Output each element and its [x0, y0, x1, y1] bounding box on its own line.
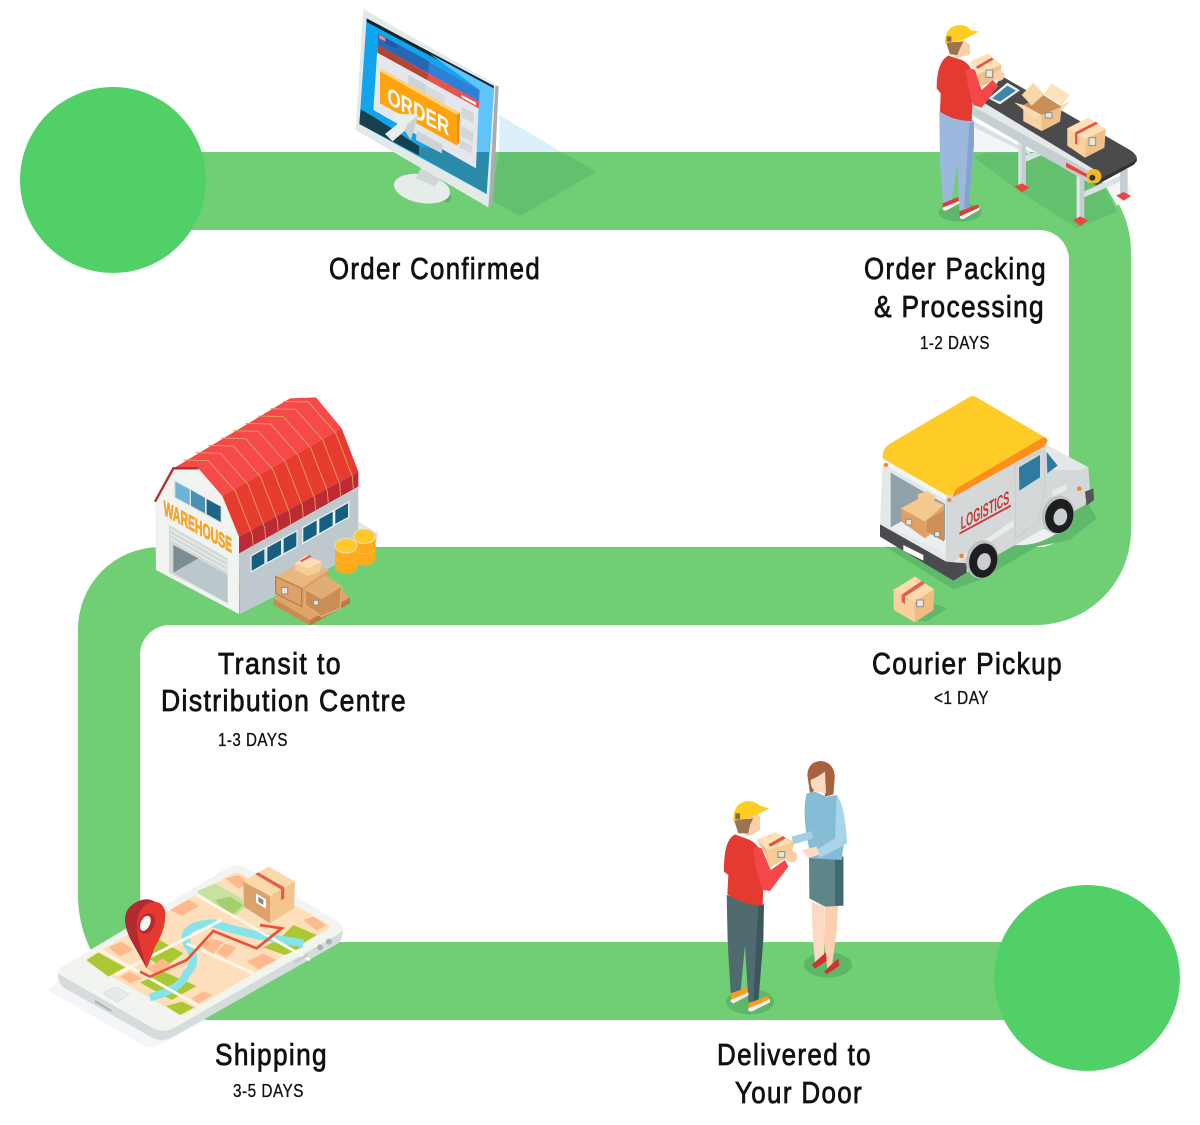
icon: worker packing boxes at conveyor [937, 25, 1137, 228]
step label: courier pickup: <1 DAY [934, 688, 989, 708]
warehouse roller door [169, 525, 228, 603]
map roads and parks [87, 875, 326, 1015]
step label: shipping: 3-5 DAYS [233, 1081, 304, 1101]
yellow barrels [335, 529, 376, 574]
step label: shipping: Shipping [215, 1037, 328, 1072]
tablet on belt [988, 83, 1020, 104]
map route line [140, 925, 282, 977]
step label: delivered to your door: Your Door [735, 1075, 863, 1110]
worker [937, 25, 1004, 222]
van cargo crates [901, 491, 944, 542]
end circle [994, 885, 1180, 1071]
courier [724, 801, 797, 1014]
step label: order packing and processing: 1-2 DAYS [920, 333, 990, 353]
step label: transit to distribution centre: Distribution Centre [161, 683, 407, 718]
van wheels [962, 492, 1078, 582]
phone buttons [95, 939, 332, 1012]
winding green route [78, 152, 1131, 1020]
customer [792, 761, 852, 978]
warehouse sign: WAREHOUSE [164, 496, 232, 558]
step label: transit to distribution centre: 1-3 DAYS [218, 730, 288, 750]
step label: order confirmed: Order Confirmed [329, 251, 541, 286]
icon: courier handing parcel to customer [724, 761, 852, 1014]
warehouse front windows [174, 479, 222, 524]
van bumper [880, 524, 967, 581]
button label: ORDER [387, 83, 449, 142]
icon: delivery van with parcel: LOGISTICS [961, 487, 1009, 535]
conveyor frame [972, 76, 1137, 226]
icon: smartphone map with pin and parcel [47, 865, 343, 1047]
step label: shipping [215, 1037, 328, 1101]
van door and windows [951, 450, 1067, 567]
parcel on route [893, 577, 947, 622]
closed box [1067, 118, 1106, 158]
step label: order packing and processing [864, 251, 1047, 353]
icon: computer monitor with order button [356, 9, 597, 216]
location pin [125, 899, 165, 968]
icon: warehouse with crates and barrels [155, 397, 378, 626]
crates on pallet [273, 555, 350, 626]
step label: delivered to your door [717, 1037, 872, 1110]
step label: order packing and processing: Order Packing [864, 251, 1047, 286]
step label: transit to distribution centre [161, 646, 407, 750]
icon: delivery van with parcel [880, 396, 1097, 622]
step label: courier pickup [872, 646, 1063, 708]
step label: delivered to your door: Delivered to [717, 1037, 872, 1072]
warehouse side windows [251, 502, 349, 572]
parcel on phone [243, 867, 295, 923]
step label: transit to distribution centre: Transit to [218, 646, 342, 681]
warehouse roof [155, 397, 358, 553]
step label: order packing and processing: & Processing [874, 289, 1045, 324]
van roof [883, 396, 1048, 496]
start circle [20, 87, 206, 273]
step label: courier pickup: Courier Pickup [872, 646, 1063, 681]
open box [1014, 83, 1071, 131]
